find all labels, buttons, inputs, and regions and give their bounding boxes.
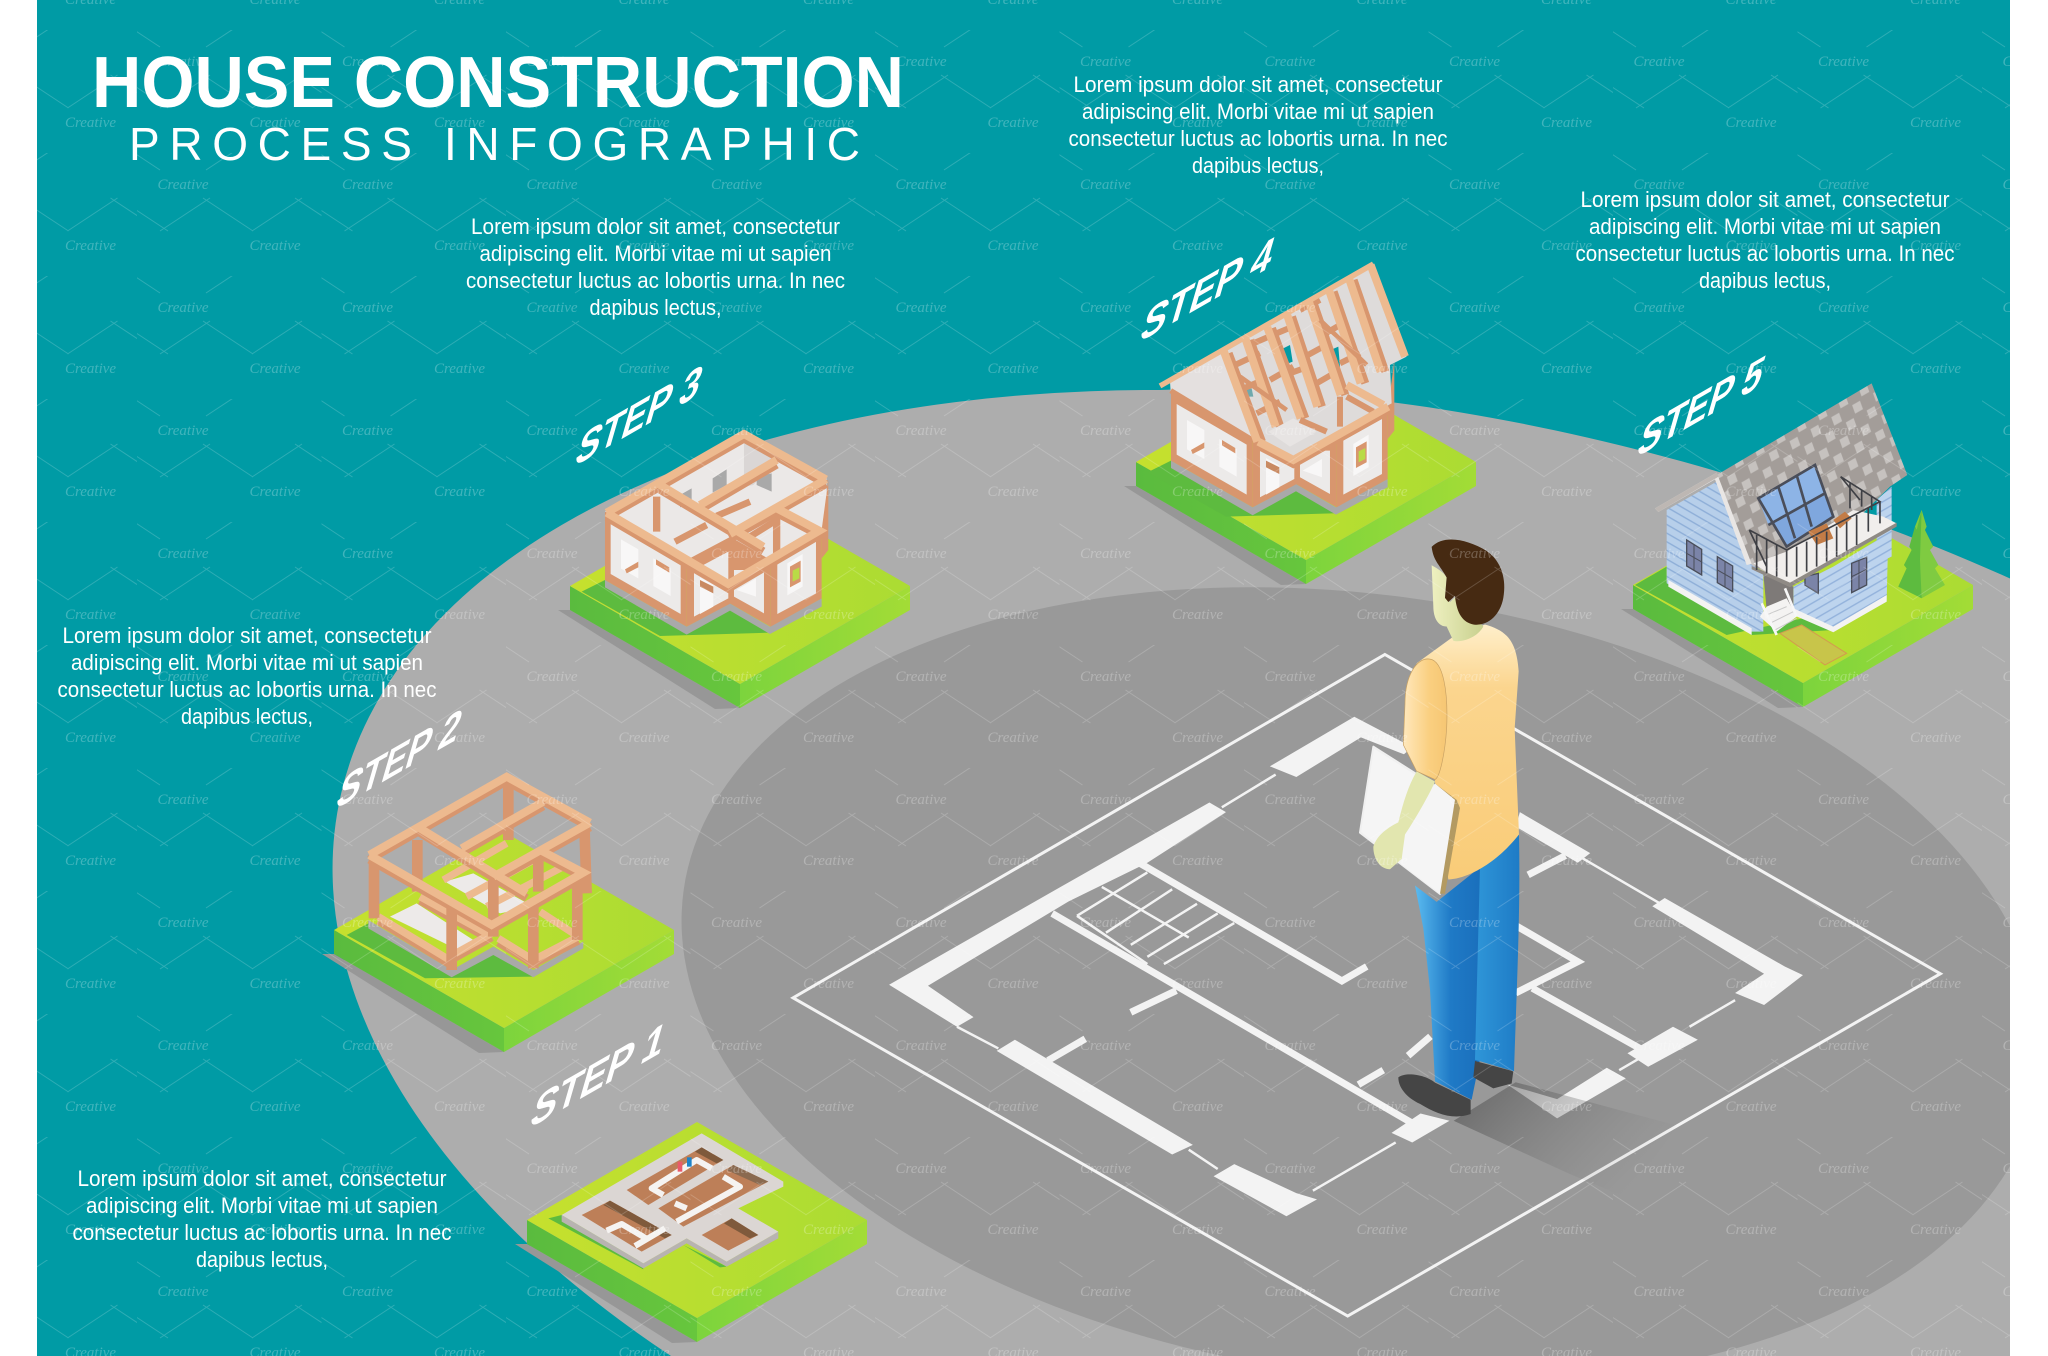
text block: step 5 bbox=[1576, 187, 1954, 293]
text block: step 3: consectetur luctus ac lobortis urna. In nec bbox=[466, 268, 845, 293]
tablet front edge bbox=[1435, 784, 1460, 894]
left page margin bbox=[0, 0, 37, 1356]
text block: step 4: Lorem ipsum dolor sit amet, consectetur bbox=[1074, 72, 1442, 97]
window lines and interior walls bbox=[957, 775, 1735, 1191]
plot boundary bbox=[793, 654, 1940, 1316]
step 4 platform: roof frame bbox=[1124, 263, 1476, 585]
icon: balcony bbox=[1749, 477, 1897, 587]
hair bbox=[1432, 540, 1504, 625]
text block: step 2: Lorem ipsum dolor sit amet, consectetur bbox=[62, 623, 432, 648]
arm and hand bbox=[1373, 771, 1435, 869]
text block: step 1: Lorem ipsum dolor sit amet, consectetur bbox=[78, 1166, 446, 1191]
floor plan blueprint bbox=[793, 654, 1940, 1316]
shoes bbox=[1398, 1061, 1513, 1116]
text block: step 1 bbox=[72, 1166, 452, 1272]
step 5 platform: finished house bbox=[1621, 383, 1973, 708]
text block: step 1: consectetur luctus ac lobortis urna. In nec bbox=[72, 1220, 452, 1245]
step 5 label: STEP 5 bbox=[1632, 345, 1771, 469]
text block: step 3: Lorem ipsum dolor sit amet, consectetur bbox=[471, 214, 840, 239]
tablet behind body bbox=[1360, 747, 1457, 894]
step 3 platform: walls bbox=[558, 432, 910, 709]
icon: entry stairs bbox=[1760, 588, 1797, 635]
text block: step 3 bbox=[466, 214, 845, 320]
text block: step 4: consectetur luctus ac lobortis urna. In nec bbox=[1068, 126, 1448, 151]
text block: step 3: dapibus lectus, bbox=[590, 295, 722, 320]
title: HOUSE CONSTRUCTION bbox=[92, 43, 904, 123]
text block: step 2: dapibus lectus, bbox=[181, 704, 313, 729]
text block: step 4 bbox=[1068, 72, 1448, 178]
person shadow bbox=[1454, 1082, 1677, 1198]
text block: step 1: adipiscing elit. Morbi vitae mi ut sapien bbox=[86, 1193, 438, 1218]
text block: step 1: dapibus lectus, bbox=[196, 1247, 328, 1272]
step 3 label: STEP 3 bbox=[570, 354, 709, 478]
step 1 platform: foundation bbox=[515, 1122, 867, 1343]
text block: step 5: consectetur luctus ac lobortis urna. In nec bbox=[1576, 241, 1954, 266]
text block: step 4: adipiscing elit. Morbi vitae mi ut sapien bbox=[1082, 99, 1434, 124]
neck and face bbox=[1432, 565, 1483, 641]
text block: step 5: adipiscing elit. Morbi vitae mi ut sapien bbox=[1589, 214, 1941, 239]
text block: step 5: Lorem ipsum dolor sit amet, consectetur bbox=[1580, 187, 1950, 212]
step 1 label: STEP 1 bbox=[525, 1011, 672, 1140]
right page margin bbox=[2010, 0, 2048, 1356]
subtitle: PROCESS INFOGRAPHIC bbox=[129, 118, 860, 170]
icon: dormer window bbox=[1758, 465, 1833, 547]
inner darker disc bbox=[682, 587, 2043, 1356]
step 2 label: STEP 2 bbox=[331, 698, 468, 821]
text block: step 2 bbox=[58, 623, 436, 729]
text block: step 2: adipiscing elit. Morbi vitae mi ut sapien bbox=[71, 650, 423, 675]
icon: walkway bbox=[1780, 625, 1847, 665]
icon: tree bbox=[1898, 510, 1945, 598]
text block: step 3: adipiscing elit. Morbi vitae mi ut sapien bbox=[480, 241, 832, 266]
roof bbox=[1717, 383, 1907, 585]
sleeve bbox=[1403, 659, 1447, 779]
text block: step 2: consectetur luctus ac lobortis urna. In nec bbox=[58, 677, 436, 702]
exterior walls bbox=[889, 717, 1803, 1216]
pants bbox=[1415, 835, 1519, 1100]
step 2 platform: structural frame bbox=[322, 777, 674, 1053]
text block: step 4: dapibus lectus, bbox=[1192, 153, 1324, 178]
step 4 label: STEP 4 bbox=[1135, 226, 1281, 354]
outer gray disc bbox=[333, 389, 2048, 1356]
text block: step 5: dapibus lectus, bbox=[1699, 268, 1831, 293]
person with tablet bbox=[1360, 540, 1519, 1116]
shirt bbox=[1417, 624, 1519, 879]
